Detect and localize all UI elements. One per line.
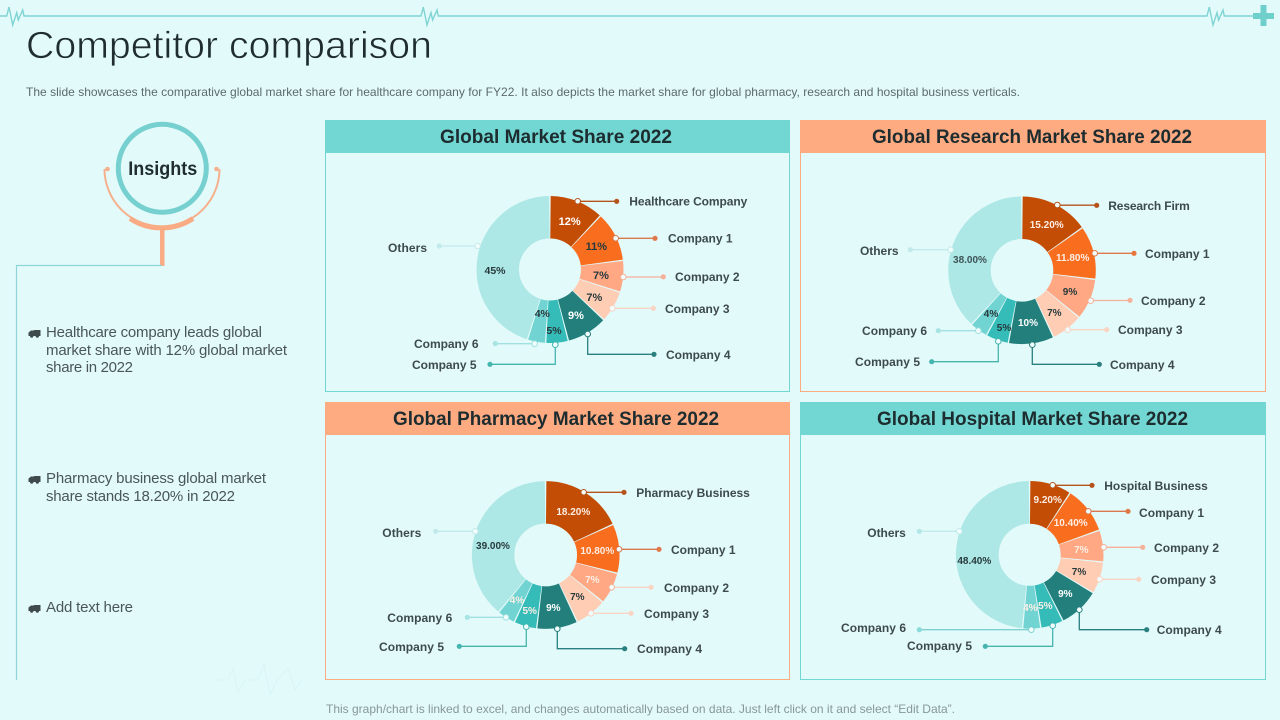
data labels: 18.20% bbox=[556, 507, 590, 518]
callout: others bbox=[867, 526, 962, 540]
data labels: 10% bbox=[1018, 318, 1038, 329]
callout: company 3: Company 3 bbox=[1151, 573, 1216, 587]
data labels: 10.40% bbox=[1054, 518, 1088, 529]
callout: company 1 bbox=[1092, 247, 1210, 261]
data labels: 5% bbox=[1038, 601, 1053, 612]
data labels: 7% bbox=[585, 575, 600, 586]
data labels: 5% bbox=[522, 606, 537, 617]
callout: research firm bbox=[1054, 199, 1190, 213]
callout: company 4: Company 4 bbox=[637, 642, 702, 656]
data labels: 11.80% bbox=[1056, 253, 1089, 264]
data labels: 7% bbox=[593, 270, 609, 282]
callout: company 2 bbox=[1101, 541, 1219, 555]
data labels: 12% bbox=[559, 216, 581, 228]
insight 1: Healthcare company leads global bbox=[46, 324, 262, 341]
title: Competitor comparison bbox=[26, 25, 432, 67]
data labels: 7% bbox=[1047, 308, 1062, 319]
callout: healthcare company bbox=[575, 194, 748, 208]
heading: global market share: Global Market Share 2022 bbox=[440, 127, 672, 148]
callout: company 5: Company 5 bbox=[855, 355, 920, 369]
data labels bbox=[953, 220, 1089, 334]
data labels: 39.00% bbox=[476, 541, 510, 552]
callout: hospital business bbox=[1050, 479, 1208, 493]
panel: global hospital market share bbox=[800, 402, 1266, 680]
callout: company 6 bbox=[841, 621, 1034, 635]
callout: company 4 bbox=[554, 626, 702, 656]
callout: company 3 bbox=[610, 302, 730, 316]
data labels: 4% bbox=[510, 596, 524, 606]
donut chart: global hospital market share bbox=[977, 502, 1082, 607]
data labels: 15.20% bbox=[1030, 220, 1064, 231]
callout: company 4: Company 4 bbox=[1110, 358, 1175, 372]
data labels: 9.20% bbox=[1034, 495, 1062, 506]
insight 1 bbox=[28, 324, 288, 376]
callout: company 4 bbox=[1076, 607, 1222, 637]
insight 1: share in 2022 bbox=[46, 359, 133, 376]
insight 2: share stands 18.20% in 2022 bbox=[46, 488, 235, 505]
callout: company 3 bbox=[1097, 573, 1216, 587]
callout: company 3: Company 3 bbox=[665, 302, 730, 316]
data labels: 9% bbox=[546, 603, 561, 614]
callout: company 2: Company 2 bbox=[1141, 294, 1206, 308]
callout: others: Others bbox=[867, 526, 906, 540]
data labels: 7% bbox=[570, 592, 585, 603]
callout: company 2 bbox=[609, 581, 729, 595]
insight 2 bbox=[28, 470, 267, 505]
callout: research firm: Research Firm bbox=[1108, 199, 1190, 213]
panel: global research market share bbox=[800, 120, 1266, 392]
callout: healthcare company: Healthcare Company bbox=[629, 194, 748, 208]
callout: others: Others bbox=[860, 244, 899, 258]
data labels: 4% bbox=[535, 308, 551, 320]
data labels: 4% bbox=[984, 309, 998, 320]
callout: company 1: Company 1 bbox=[1139, 506, 1204, 520]
callout: others: Others bbox=[382, 526, 422, 540]
data labels: 4% bbox=[1023, 603, 1038, 614]
panel: global pharmacy market share bbox=[325, 402, 790, 680]
faint heartbeat watermark bbox=[218, 665, 302, 695]
callout: company 3 bbox=[1065, 323, 1183, 337]
data labels: 45% bbox=[484, 265, 506, 277]
callout: company 1 bbox=[616, 543, 736, 557]
data labels: 9% bbox=[568, 310, 584, 322]
top heartbeat line with cross bbox=[0, 5, 1274, 26]
panel: global market share bbox=[325, 120, 790, 392]
callout: company 6 bbox=[387, 611, 509, 625]
callout: company 1: Company 1 bbox=[668, 232, 733, 246]
heading: global hospital market share: Global Hospital Market Share 2022 bbox=[877, 409, 1188, 430]
donut chart: global research market share bbox=[969, 218, 1075, 323]
callout: company 1 bbox=[1086, 506, 1204, 520]
data labels: 9% bbox=[1058, 589, 1073, 600]
data labels: 48.40% bbox=[957, 556, 991, 567]
donut chart: global market share bbox=[498, 217, 602, 322]
callout: company 5 bbox=[907, 623, 1055, 653]
callout: company 6: Company 6 bbox=[387, 611, 453, 625]
data labels: 11% bbox=[586, 241, 607, 253]
callout: company 3: Company 3 bbox=[1118, 323, 1183, 337]
data labels: 9% bbox=[1063, 287, 1077, 298]
callout: company 2 bbox=[1088, 294, 1206, 308]
callout: company 6: Company 6 bbox=[862, 324, 927, 338]
callout: company 1: Company 1 bbox=[671, 543, 736, 557]
data labels: 5% bbox=[546, 325, 562, 337]
callout: company 6: Company 6 bbox=[414, 337, 479, 351]
insights badge bbox=[104, 124, 220, 266]
data labels bbox=[957, 495, 1089, 614]
data labels bbox=[484, 216, 609, 337]
callout: company 3 bbox=[588, 607, 709, 621]
donut chart: global pharmacy market share bbox=[493, 502, 598, 608]
callout: company 5 bbox=[412, 342, 558, 372]
callout: company 4 bbox=[1030, 342, 1175, 372]
footnote: This graph/chart is linked to excel, and changes automatically based on data. Just left click on it and select “Edit Data”. bbox=[326, 702, 955, 716]
callout: others: Others bbox=[388, 241, 427, 255]
data labels: 5% bbox=[997, 323, 1011, 334]
heading: global pharmacy market share: Global Pharmacy Market Share 2022 bbox=[393, 409, 719, 430]
callout: company 5 bbox=[379, 624, 529, 654]
callout: company 2 bbox=[620, 270, 740, 284]
callout: hospital business: Hospital Business bbox=[1104, 479, 1208, 493]
callout: company 4: Company 4 bbox=[1157, 623, 1222, 637]
insight 2: Pharmacy business global market bbox=[46, 470, 267, 487]
callout: pharmacy business: Pharmacy Business bbox=[636, 486, 750, 500]
callout: others bbox=[388, 241, 481, 255]
data labels: 38.00% bbox=[953, 255, 987, 266]
callout: company 1: Company 1 bbox=[1145, 247, 1210, 261]
callout: company 1 bbox=[613, 232, 733, 246]
callout: company 6: Company 6 bbox=[841, 621, 906, 635]
callout: company 2: Company 2 bbox=[664, 581, 729, 595]
data labels: 7% bbox=[1072, 567, 1086, 578]
callout: company 6 bbox=[862, 324, 981, 338]
callout: company 4: Company 4 bbox=[666, 348, 731, 362]
insights connector frame bbox=[16, 266, 162, 680]
callout: pharmacy business bbox=[581, 486, 750, 500]
callout: company 5: Company 5 bbox=[907, 639, 972, 653]
subtitle: The slide showcases the comparative global market share for healthcare company for FY22. It also depicts the market share for global pharmacy, research and hospital business verticals. bbox=[26, 85, 1020, 99]
insight 1: market share with 12% global market bbox=[46, 342, 288, 359]
callout: company 2: Company 2 bbox=[675, 270, 740, 284]
insight 3: Add text here bbox=[46, 599, 133, 616]
callout: company 6 bbox=[414, 337, 538, 351]
heading: global research market share: Global Research Market Share 2022 bbox=[872, 127, 1192, 148]
callout: company 2: Company 2 bbox=[1154, 541, 1219, 555]
callout: company 5: Company 5 bbox=[379, 640, 444, 654]
insights badge: Insights bbox=[128, 159, 197, 180]
data labels: 7% bbox=[1074, 545, 1089, 556]
callout: others bbox=[860, 244, 954, 258]
callout: company 4 bbox=[585, 331, 731, 362]
callout: others bbox=[382, 526, 478, 540]
callout: company 5: Company 5 bbox=[412, 358, 477, 372]
data labels bbox=[476, 507, 614, 617]
callout: company 5 bbox=[855, 338, 1001, 369]
callout: company 3: Company 3 bbox=[644, 607, 709, 621]
data labels: 7% bbox=[586, 292, 602, 304]
data labels: 10.80% bbox=[580, 546, 614, 557]
